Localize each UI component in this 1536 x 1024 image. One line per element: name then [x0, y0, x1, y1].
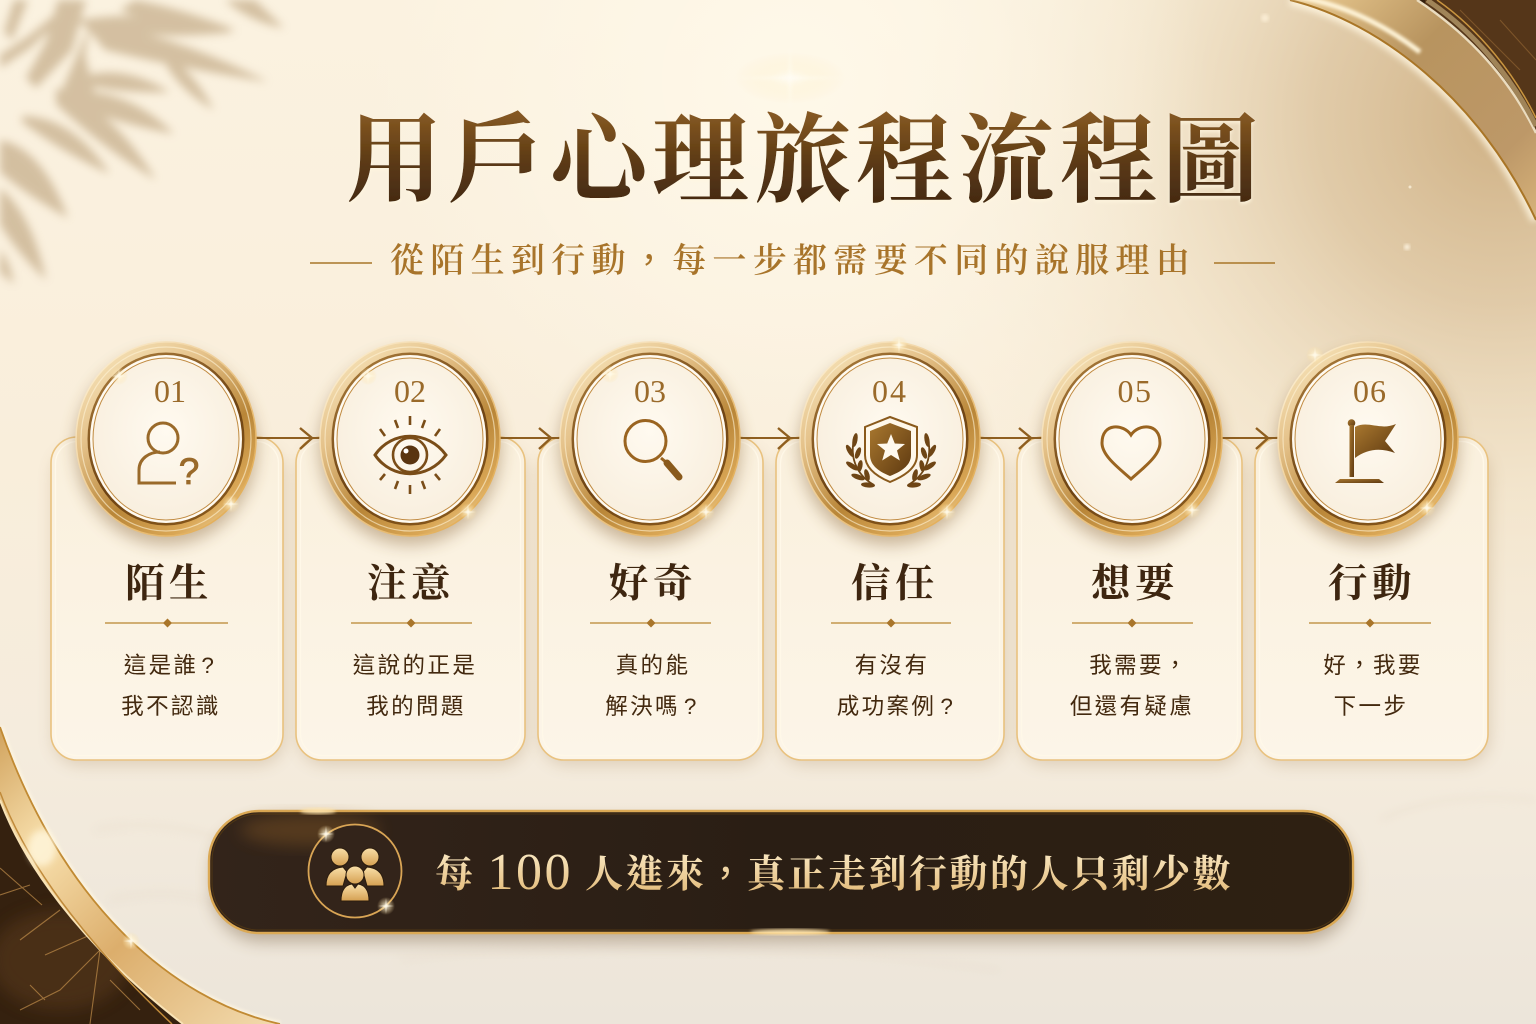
step text: 真的能: [616, 653, 690, 678]
step 04 badge: [799, 336, 981, 545]
panel: step 06 card: [1255, 437, 1490, 765]
top center sparkle: [735, 48, 845, 108]
step 05 badge: [1041, 342, 1223, 545]
step text: [605, 653, 699, 719]
arrow 05 to 06: [1212, 428, 1292, 449]
callout text: 每: [435, 854, 476, 896]
number: 06: [1353, 373, 1387, 409]
step name: 想要: [1091, 562, 1179, 606]
panel: step 04 card: [776, 437, 1006, 765]
title: 用戶心理旅程流程圖: [346, 108, 1264, 215]
step text: 這說的正是: [353, 653, 477, 678]
step text: [1323, 653, 1423, 719]
step text: [837, 653, 955, 719]
icon: eye: [375, 416, 446, 494]
callout text: ，真正走到行動的人只剩少數: [707, 843, 1233, 898]
step 06 badge: [1277, 342, 1459, 545]
divider: [351, 618, 472, 628]
callout banner: [209, 808, 1353, 942]
divider: [590, 618, 711, 628]
leaf shadows: [0, 0, 284, 284]
icon: heart: [1102, 427, 1160, 479]
panel: step 05 card: [1017, 437, 1244, 765]
step text: 有沒有: [855, 653, 929, 678]
number: 02: [394, 373, 426, 409]
step text: 好，我要: [1323, 653, 1423, 678]
panel: step 02 card: [296, 437, 527, 765]
frame inner glow: [1290, 0, 1536, 220]
step 01 badge: [75, 342, 257, 545]
step text: 下一步: [1334, 694, 1408, 719]
step name: 好奇: [609, 562, 697, 606]
step text: 成功案例?: [837, 694, 955, 719]
icon: magnifying glass: [625, 420, 679, 477]
step text: 解決嗎?: [605, 694, 699, 719]
number: 04: [872, 373, 908, 409]
divider: [105, 618, 228, 628]
step text: 但還有疑慮: [1070, 694, 1194, 719]
step name: 注意: [367, 561, 455, 606]
step name: 信任: [851, 562, 939, 606]
divider: [1072, 618, 1193, 628]
step text: [1070, 653, 1194, 719]
marble veins: [95, 798, 1536, 970]
step text: 我需要，: [1089, 653, 1189, 678]
step name: 陌生: [125, 562, 213, 606]
callout text: 100: [488, 844, 573, 901]
arrow 04 to 05: [972, 428, 1056, 449]
arrow 03 to 04: [734, 428, 815, 449]
icon: flag: [1335, 419, 1396, 483]
arrow 02 to 03: [494, 428, 575, 449]
icon: people group: [308, 824, 402, 918]
number: 05: [1118, 373, 1152, 409]
icon: shield with star and laurels: [844, 417, 938, 488]
panel: step 01 card: [51, 437, 285, 765]
panel: step 03 card: [538, 437, 765, 765]
number: 03: [634, 373, 666, 409]
icon: person with question mark: [139, 423, 199, 492]
divider: [831, 618, 951, 628]
divider: [1309, 618, 1431, 628]
step 02 badge: [319, 342, 501, 545]
step text: [353, 653, 477, 719]
step text: [121, 653, 221, 719]
step 03 badge: [559, 342, 741, 545]
arrow 01 to 02: [250, 428, 334, 449]
callout text: 人進來: [573, 854, 707, 896]
step name: 行動: [1328, 562, 1416, 606]
step text: 我的問題: [366, 694, 466, 719]
step text: 這是誰?: [124, 653, 216, 678]
step text: 我不認識: [121, 694, 221, 719]
number: 01: [154, 373, 186, 409]
icon: person with question mark: ?: [179, 451, 199, 492]
subtitle: 從陌生到行動，每一步都需要不同的說服理由: [390, 233, 1196, 282]
